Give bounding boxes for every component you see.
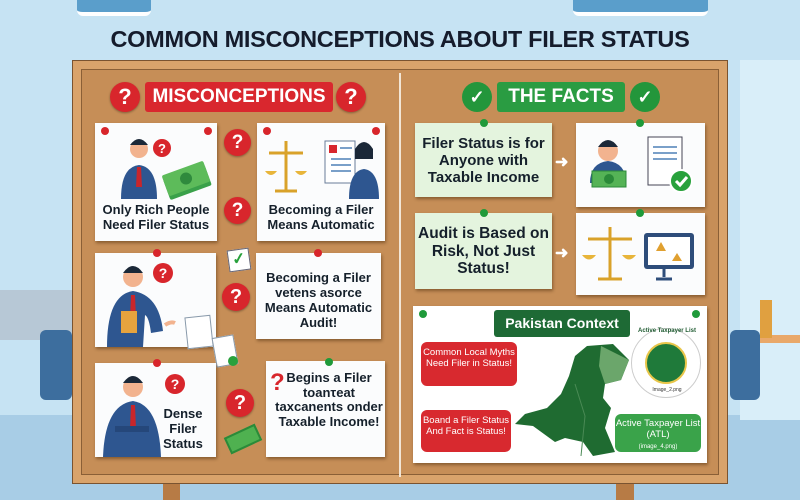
- header: misconceptions: MISCONCEPTIONS: [152, 86, 326, 107]
- seal: ATL: [631, 328, 701, 398]
- icon: money: [224, 424, 262, 454]
- fact 1 image: [576, 123, 705, 207]
- arrow: ➜: [555, 154, 568, 171]
- callout red 1: Common Local Myths Need Filer in Status!: [423, 347, 515, 369]
- card 3: man with folder: ?: [159, 265, 167, 281]
- card 1: only rich people: [95, 123, 217, 241]
- cork board: [73, 61, 727, 483]
- heading: Pakistan Context: [505, 315, 619, 331]
- card 4: Becoming a Filer vetens asorce Means Automatic Audit!: [265, 270, 372, 330]
- card 1: only rich people: Only Rich People Need Filer Status: [103, 202, 209, 232]
- header: the facts: ✓: [469, 87, 485, 107]
- card 5: [95, 363, 216, 457]
- card 1: only rich people: ?: [158, 141, 166, 156]
- map: [515, 344, 629, 456]
- text: ?: [230, 286, 242, 308]
- card 6: ?: [270, 369, 285, 396]
- fact 2 text: Audit is Based on Risk, Not Just Status!: [418, 225, 549, 277]
- callout green: (image_4.png): [639, 444, 677, 450]
- card 5: ?: [171, 376, 179, 392]
- fact 2 image: [576, 213, 705, 295]
- heading: [494, 310, 630, 337]
- header: the facts: [462, 82, 660, 112]
- lamps: [77, 0, 151, 16]
- callout green: [615, 414, 701, 452]
- card 3: man with folder: [95, 253, 216, 347]
- callout green: Active Taxpayer List (ATL): [616, 418, 700, 440]
- card 4: [256, 253, 381, 339]
- seal: ATL: Active Taxpayer List: [638, 328, 696, 334]
- card 5: Dense Filer Status: [163, 406, 203, 451]
- text: ?: [234, 392, 246, 414]
- text: ?: [232, 200, 243, 221]
- fact 1 text: Filer Status is for Anyone with Taxable Income: [422, 135, 545, 186]
- icon: check: ✓: [231, 250, 247, 269]
- icon: documents: [184, 314, 238, 368]
- card 2: becoming a filer: [257, 123, 385, 241]
- card 6: Begins a Filer toanτeat taxcanents onder Taxable Income!: [275, 370, 383, 428]
- header: misconceptions: ?: [344, 84, 358, 109]
- header: misconceptions: [109, 82, 367, 114]
- header: the facts: THE FACTS: [508, 86, 614, 107]
- board legs: [163, 480, 180, 500]
- fact 2 text: [415, 213, 552, 289]
- callout red 1: [421, 342, 517, 386]
- fact 1 text: [415, 123, 552, 197]
- callout red 2: Boand a Filer Status And Fact is Status!: [423, 415, 509, 437]
- arrow: ➜: [555, 245, 568, 262]
- callout red 2: [421, 410, 511, 452]
- header: misconceptions: ?: [118, 84, 132, 109]
- header: the facts: ✓: [637, 87, 653, 107]
- card 6: [266, 361, 385, 457]
- card 2: becoming a filer: Becoming a Filer Means Automatic: [267, 202, 375, 232]
- icon: check: [227, 248, 251, 272]
- panel: pakistan context: [413, 306, 707, 463]
- title: COMMON MISCONCEPTIONS ABOUT FILER STATUS: [111, 26, 689, 52]
- question icons column top: ?: [232, 132, 243, 153]
- seal: ATL: Image_2.png: [652, 387, 682, 393]
- question icons column top: [224, 129, 251, 156]
